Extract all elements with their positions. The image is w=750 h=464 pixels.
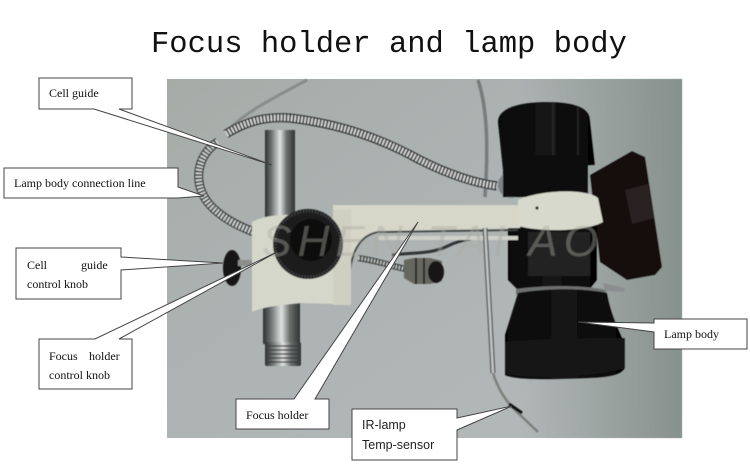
callout: cell guide control knob: Cell (27, 258, 48, 272)
lamp clamp (516, 286, 606, 295)
photo: focus holder and lamp body (167, 79, 682, 438)
lamp top cylinder (498, 102, 595, 170)
callout: cell guide control knob: control knob (27, 277, 88, 291)
callout: cell guide: Cell guide (49, 86, 99, 100)
metal hose upper (226, 118, 497, 186)
rod thread (265, 342, 301, 366)
callout: focus holder (236, 222, 418, 429)
title: Focus holder and lamp body (151, 28, 627, 62)
holder block (252, 215, 333, 312)
holder side plate (333, 210, 351, 305)
callout: focus holder control knob: control knob (49, 368, 110, 382)
temp sensor probe (485, 228, 493, 373)
lamp cone body (505, 289, 625, 379)
watermark: SHEN TAI AO (262, 217, 598, 266)
focus holder arm (333, 205, 520, 280)
callout: focus holder: Focus holder (246, 408, 308, 422)
callout: focus holder control knob: holder (89, 349, 120, 363)
background shading (520, 79, 682, 438)
callout: lamp body connection line: Lamp body connection line (14, 176, 146, 190)
arm bracket (350, 230, 518, 288)
lamp reflector plate (590, 151, 662, 280)
callout: lamp body: Lamp body (664, 327, 719, 341)
hose nut (498, 172, 524, 198)
focus knob (273, 209, 343, 279)
metal hose left (199, 142, 254, 232)
control knob small (223, 250, 241, 286)
lamp ring (518, 191, 603, 230)
lamp lower section (508, 225, 597, 290)
lamp middle (503, 155, 588, 197)
callout: IR-lamp temp-sensor (352, 406, 512, 460)
callout: cell guide control knob: guide (81, 258, 108, 272)
callout: IR-lamp temp-sensor: IR-lamp (362, 418, 406, 432)
photo background (167, 79, 682, 438)
callout: lamp body connection line (4, 168, 204, 198)
cell guide rod lower (263, 300, 300, 344)
callout: lamp body (578, 319, 747, 349)
callout: focus holder control knob: Focus (49, 349, 78, 363)
fine cable (478, 80, 487, 197)
callout: IR-lamp temp-sensor: Temp-sensor (362, 438, 434, 452)
cell guide rod upper (265, 130, 295, 220)
callout: cell guide (39, 78, 272, 165)
callout: focus holder control knob (39, 252, 277, 389)
lower cable and connector (358, 258, 412, 270)
callout: cell guide control knob (16, 248, 223, 299)
